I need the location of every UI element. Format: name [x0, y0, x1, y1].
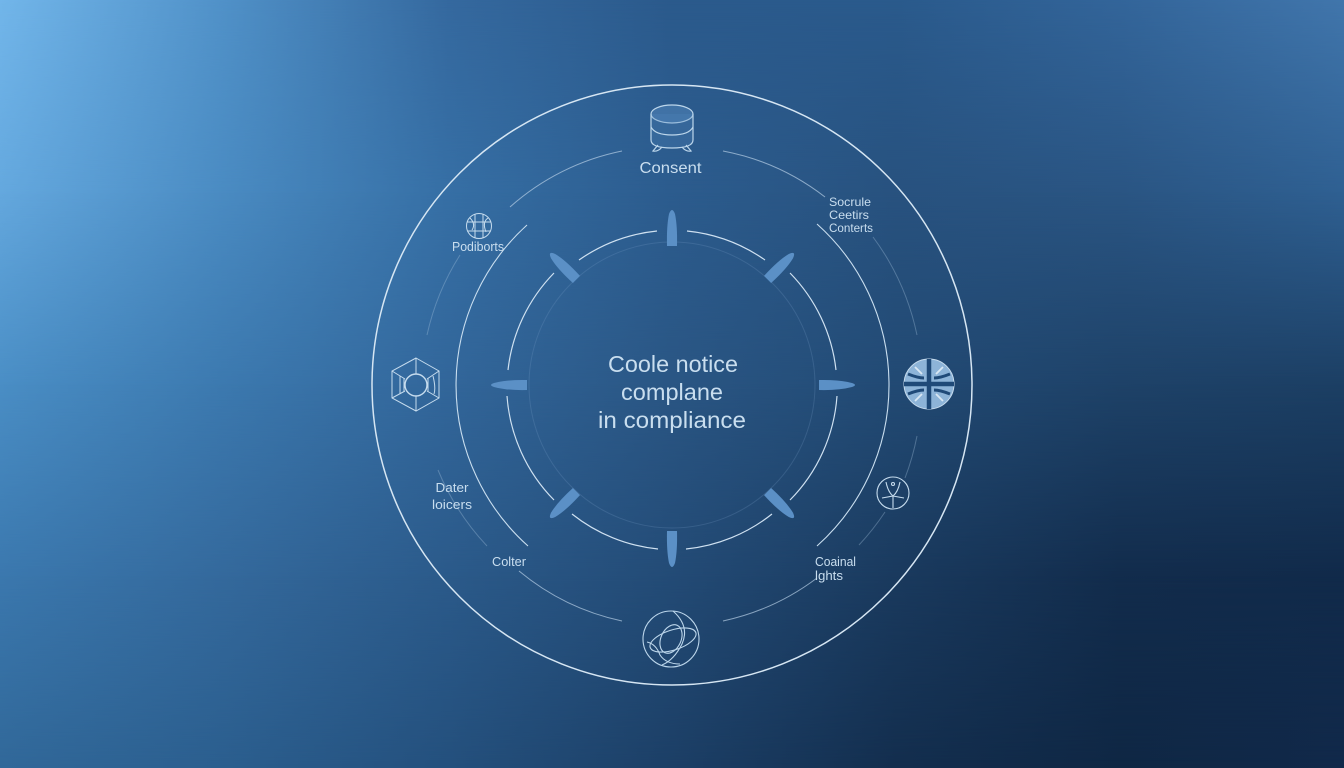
- outer ring: [372, 85, 972, 685]
- connector arcs radius 240: [510, 151, 825, 621]
- label: Coainal lights: lghts: [815, 568, 844, 583]
- center title: complane: [621, 379, 723, 405]
- label: Coainal lights: [815, 554, 856, 583]
- icon: globe small: [466, 214, 492, 238]
- label: top right stack: Conterts: [829, 221, 873, 235]
- eight radial tick markers: [491, 210, 855, 567]
- center title: in compliance: [598, 407, 746, 433]
- inner ring arcs: [507, 231, 837, 549]
- faint inner circle: [529, 242, 815, 528]
- faint connector arcs radius 250: [427, 237, 917, 546]
- icon: small circle: [877, 477, 909, 509]
- icon: orbit sphere: [643, 611, 699, 667]
- label: Consent: Consent: [640, 160, 702, 177]
- label: Dater loicers: Dater: [436, 480, 469, 495]
- label: Podiborts: Podiborts: [452, 239, 504, 254]
- label: top right stack: [829, 195, 873, 235]
- icon: hexagon: [392, 358, 439, 411]
- label: Dater loicers: loicers: [432, 497, 473, 512]
- label: Dater loicers: [432, 480, 473, 512]
- icon: filled globe: [904, 359, 954, 409]
- label: Colter: Colter: [492, 554, 527, 569]
- label: Coainal lights: Coainal: [815, 554, 856, 569]
- icon: database: [651, 105, 693, 151]
- middle ring arcs: [456, 224, 889, 546]
- label: top right stack: Ceetirs: [829, 208, 869, 222]
- center title: Coole notice: [608, 351, 738, 377]
- center title: [598, 351, 746, 433]
- label: top right stack: Socrule: [829, 195, 871, 209]
